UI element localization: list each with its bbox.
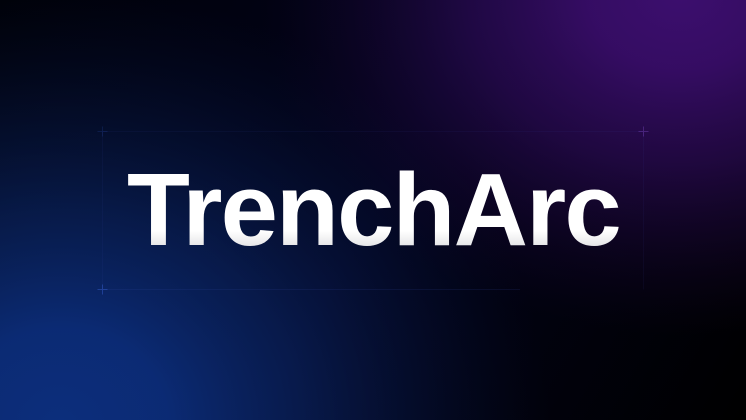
- title: TrenchArc: [127, 152, 620, 267]
- frame lines and crosshair marks: [98, 126, 648, 294]
